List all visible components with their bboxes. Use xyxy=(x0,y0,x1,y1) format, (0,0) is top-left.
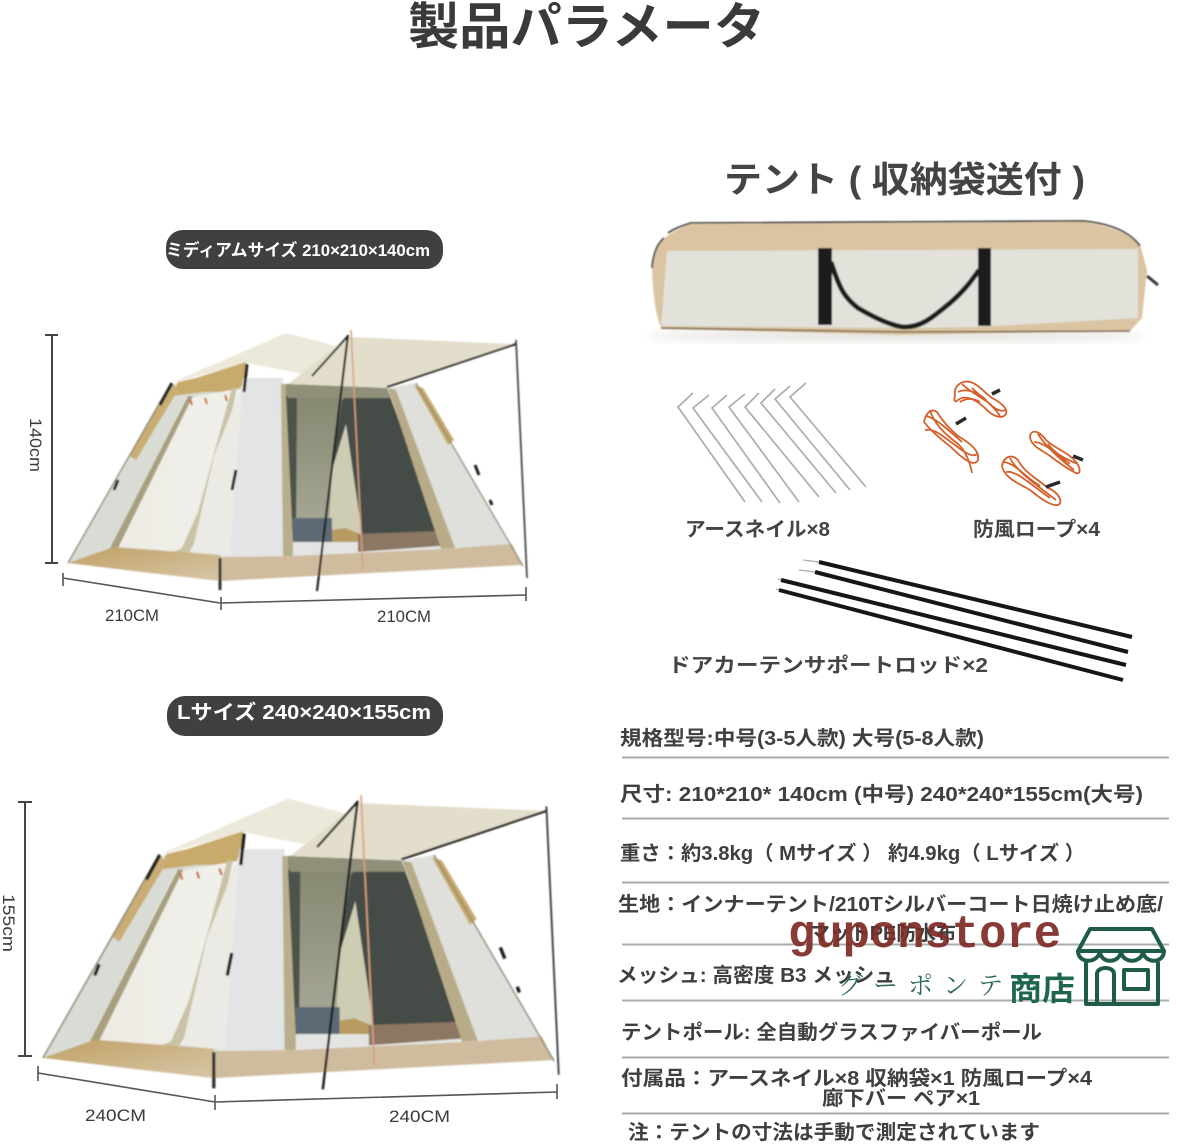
pill: medium size: ミディアムサイズ 210×210×140cm xyxy=(166,240,430,260)
dimension: large width: 240CM xyxy=(389,1107,450,1126)
dimension: medium height xyxy=(26,335,58,563)
label: wind ropes: 防風ロープ×4 xyxy=(973,518,1101,541)
spec: accessories: 付属品：アースネイル×8 収納袋×1 防風ロープ×4 xyxy=(621,1067,1093,1090)
dimension: large width xyxy=(38,1066,557,1126)
image: storage bag xyxy=(645,221,1158,341)
pill: large size: Lサイズ 240×240×155cm xyxy=(177,700,431,724)
icon: shop xyxy=(1078,929,1164,1004)
spec: accessories line 2: 廊下バー ペア×1 xyxy=(822,1087,980,1110)
image: ground stakes xyxy=(678,383,866,503)
label: support rods: ドアカーテンサポートロッド×2 xyxy=(668,654,988,677)
spec: mesh: メッシュ: 高密度 B3 メッシュ xyxy=(617,964,895,987)
watermark: shop name xyxy=(838,966,1075,1007)
spec: weight: 重さ：約3.8kg（ Mサイズ ） 約4.9kg（ Lサイズ ） xyxy=(620,841,1085,865)
label: ground stakes: アースネイル×8 xyxy=(685,518,830,541)
dimension: medium height: 140cm xyxy=(26,418,45,472)
spec: size: 尺寸: 210*210* 140cm (中号) 240*240*155cm(大号) xyxy=(620,783,1143,806)
image: wind ropes xyxy=(924,382,1083,505)
pill: medium size xyxy=(166,230,443,269)
dimension: medium width: 210CM xyxy=(377,607,431,626)
title: 製品パラメータ xyxy=(408,0,765,55)
dimension: medium width xyxy=(63,573,526,626)
spec: fabric line 2: マットPE防水布 xyxy=(810,922,956,945)
watermark: guponstore: guponstore xyxy=(788,909,1061,961)
dimension: medium width: 210CM xyxy=(105,606,159,625)
heading: tent with storage bag: テント ( 収納袋送付 ) xyxy=(724,159,1085,200)
image: large tent xyxy=(43,795,559,1089)
image: medium tent xyxy=(68,330,527,591)
image: support rods xyxy=(776,560,1132,680)
spec table xyxy=(617,727,1169,1144)
spec: pole: テントポール: 全自動グラスファイバーポール xyxy=(621,1020,1042,1044)
spec: fabric: 生地：インナーテント/210Tシルバーコート日焼け止め底/ xyxy=(618,893,1163,916)
watermark: shop name: グーポンテ xyxy=(838,966,1003,1002)
dimension: large height xyxy=(0,802,32,1056)
pill: large size xyxy=(167,696,443,736)
note: 注：テントの寸法は手動で測定されています xyxy=(628,1121,1040,1144)
watermark: shop name: 商店 xyxy=(1009,971,1075,1007)
dimension: large width: 240CM xyxy=(85,1106,146,1125)
spec: model: 規格型号:中号(3-5人款) 大号(5-8人款) xyxy=(620,727,984,750)
